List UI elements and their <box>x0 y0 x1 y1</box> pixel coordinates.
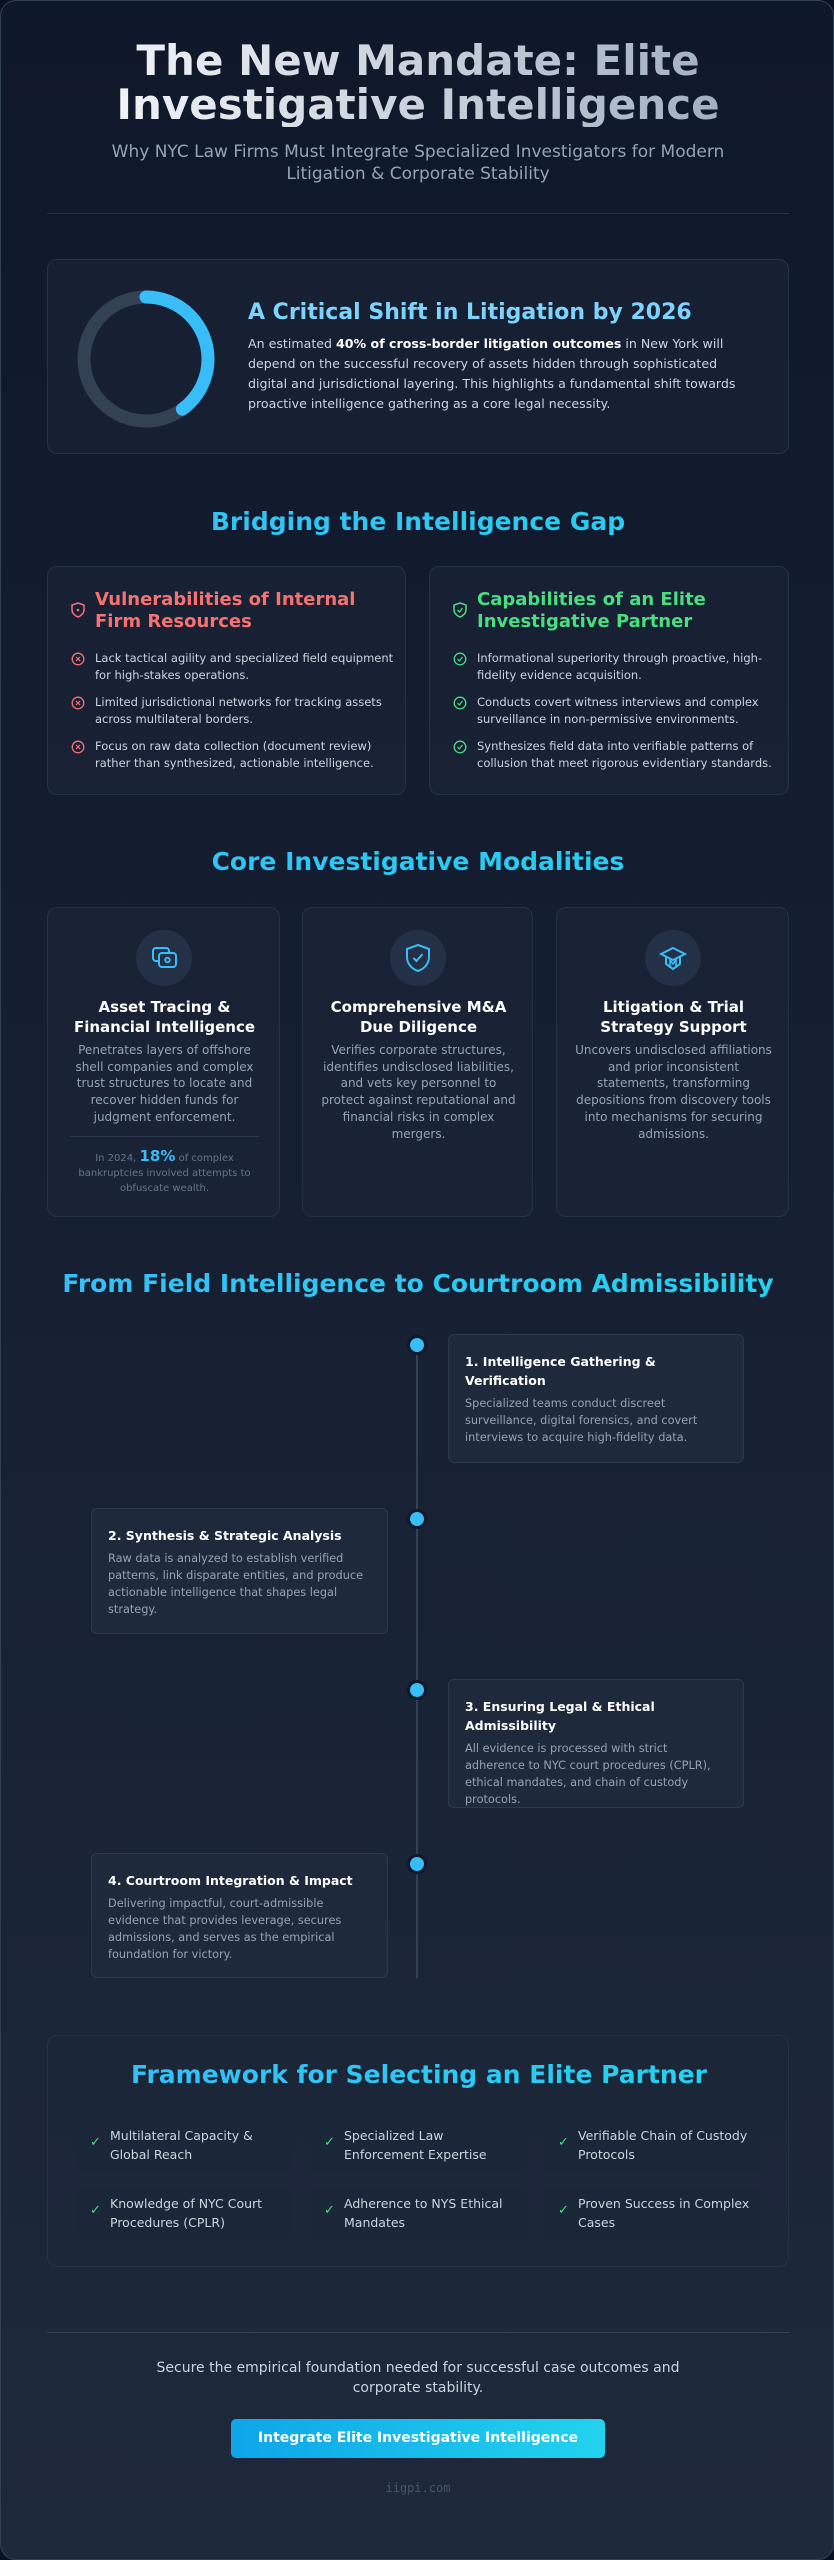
panel: framework: Cases <box>578 2215 615 2230</box>
title: Asset Tracing & <box>99 998 230 1016</box>
panel: framework: Proven Success in Complex <box>578 2196 749 2211</box>
icon: money <box>136 930 192 986</box>
criteria grid <box>90 2128 749 2230</box>
step 3: 3. Ensuring Legal & Ethical Admissibility <box>465 1699 655 1733</box>
heading: Capabilities of an Elite <box>477 589 706 610</box>
desc: Penetrates layers of offshore shell companies and complex trust structures to locate and recover hidden funds for judgment enforcement. <box>76 1043 253 1124</box>
step 3 <box>448 1679 744 1808</box>
icon: shield check <box>390 930 446 986</box>
panel: framework: Enforcement Expertise <box>344 2147 487 2162</box>
panel: M&A <box>302 907 533 1217</box>
title: Comprehensive M&A <box>331 998 506 1016</box>
stat: In 2024, 18% of complex bankruptcies involved attempts to obfuscate wealth. <box>78 1147 251 1194</box>
dot 3 <box>407 1680 427 1700</box>
step 1: 1. Intelligence Gathering & Verification <box>465 1354 656 1388</box>
heading: Investigative Partner <box>477 611 692 632</box>
panel: framework: ✓ <box>90 2135 101 2150</box>
title: Due Diligence <box>360 1018 477 1036</box>
icon: shield green <box>453 602 467 618</box>
list <box>454 651 772 770</box>
panel: framework: ✓ <box>324 2203 335 2218</box>
panel: framework <box>47 2035 789 2267</box>
step 1: Specialized teams conduct discreet surveillance, digital forensics, and covert interviews to acquire high-fidelity data. <box>465 1397 697 1444</box>
panel: framework: Specialized Law <box>344 2128 444 2143</box>
icon: shield red <box>71 602 85 618</box>
heading: Framework for Selecting an Elite Partner <box>131 2060 707 2089</box>
panel: framework: ✓ <box>558 2135 569 2150</box>
heading: modalities <box>1 847 834 876</box>
title: Investigative Intelligence <box>116 80 720 129</box>
step 4: 4. Courtroom Integration & Impact <box>108 1873 353 1888</box>
heading <box>477 589 706 632</box>
panel: capabilities <box>429 566 789 795</box>
panel: capabilities: Conducts covert witness interviews and complex surveillance in non-permissive environments. <box>477 695 759 726</box>
heading: Firm Resources <box>95 611 252 632</box>
step 1 <box>448 1334 744 1463</box>
title: Litigation & Trial <box>603 998 744 1016</box>
dot 1 <box>407 1335 427 1355</box>
title: The New Mandate: Elite <box>136 36 700 85</box>
brand: iigpi.com <box>385 2481 451 2495</box>
panel: asset tracing <box>47 907 280 1217</box>
step 2: 2. Synthesis & Strategic Analysis <box>108 1528 342 1543</box>
panel: litigation <box>556 907 789 1217</box>
title <box>600 998 747 1036</box>
subtitle: Why NYC Law Firms Must Integrate Specialized Investigators for Modern Litigation & Corporate Stability <box>112 142 724 184</box>
body text: An estimated 40% of cross-border litigation outcomes in New York will depend on the successful recovery of assets hidden through sophisticated digital and jurisdictional layering. This highlights a fundamental shift towards proactive intelligence gathering as a core legal necessity. <box>248 336 735 411</box>
step 2: Raw data is analyzed to establish verified patterns, link disparate entities, and produce actionable intelligence that shapes legal strategy. <box>108 1552 363 1616</box>
step 2 <box>91 1508 388 1634</box>
panel: framework: ✓ <box>324 2135 335 2150</box>
heading <box>95 589 355 632</box>
icon: graduation cap <box>645 930 701 986</box>
panel: framework: Adherence to NYS Ethical <box>344 2196 503 2211</box>
footer text: Secure the empirical foundation needed for successful case outcomes and corporate stability. <box>156 2360 679 2396</box>
step 4 <box>91 1853 388 1978</box>
title <box>74 998 255 1036</box>
panel: vulnerabilities: Lack tactical agility and specialized field equipment for high-stakes operations. <box>95 651 393 682</box>
dot 4 <box>407 1854 427 1874</box>
panel: vulnerabilities <box>47 566 406 795</box>
panel: critical shift <box>47 259 789 454</box>
panel: capabilities: Informational superiority through proactive, high-fidelity evidence acquisition. <box>477 651 762 682</box>
panel: framework: Global Reach <box>110 2147 192 2162</box>
heading: bridging <box>1 507 834 536</box>
title: Strategy Support <box>600 1018 747 1036</box>
donut chart <box>78 290 214 428</box>
panel: capabilities: Synthesizes field data into verifiable patterns of collusion that meet rigorous evidentiary standards. <box>477 739 772 770</box>
step 4: Delivering impactful, court-admissible evidence that provides leverage, secures admissions, and serves as the empirical foundation for victory. <box>108 1897 341 1961</box>
title <box>331 998 506 1036</box>
step 3: All evidence is processed with strict adherence to NYC court procedures (CPLR), ethical mandates, and chain of custody protocols. <box>465 1742 711 1806</box>
button: Integrate Elite Investigative Intelligence <box>258 2430 578 2446</box>
button <box>231 2419 605 2458</box>
panel: vulnerabilities: Limited jurisdictional networks for tracking assets across multilateral borders. <box>95 695 382 726</box>
panel: framework: ✓ <box>90 2203 101 2218</box>
panel: framework: Multilateral Capacity & <box>110 2128 253 2143</box>
heading: Vulnerabilities of Internal <box>95 589 355 610</box>
desc: Verifies corporate structures, identifies undisclosed liabilities, and vets key personnel to protect against reputational and financial risks in complex mergers. <box>321 1043 516 1141</box>
panel: framework: Mandates <box>344 2215 405 2230</box>
list <box>72 651 393 770</box>
heading: bridging: Bridging the Intelligence Gap <box>211 507 625 536</box>
heading: modalities: Core Investigative Modalities <box>212 847 624 876</box>
heading: timeline: From Field Intelligence to Courtroom Admissibility <box>62 1269 774 1298</box>
panel: framework: Procedures (CPLR) <box>110 2215 225 2230</box>
panel: framework: Knowledge of NYC Court <box>110 2196 262 2211</box>
desc: Uncovers undisclosed affiliations and prior inconsistent statements, transforming depositions from discovery tools into mechanisms for securing admissions. <box>575 1043 772 1141</box>
panel: framework: Protocols <box>578 2147 635 2162</box>
title <box>1 39 834 127</box>
panel: vulnerabilities: Focus on raw data collection (document review) rather than synthesized, actionable intelligence. <box>95 739 374 770</box>
title: Financial Intelligence <box>74 1018 255 1036</box>
timeline <box>416 1355 418 1978</box>
heading: A Critical Shift in Litigation by 2026 <box>248 300 692 325</box>
dot 2 <box>407 1509 427 1529</box>
panel: framework: ✓ <box>558 2203 569 2218</box>
panel: framework: Verifiable Chain of Custody <box>578 2128 747 2143</box>
